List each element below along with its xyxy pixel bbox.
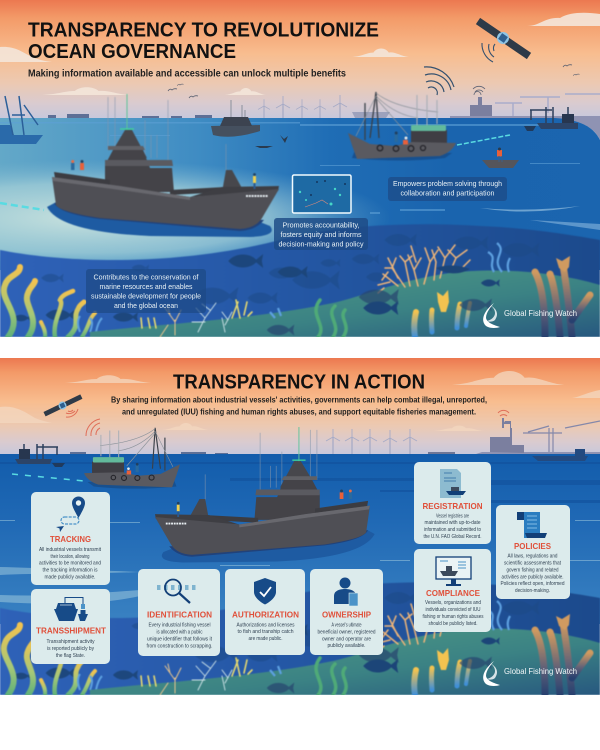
water streaks	[0, 462, 600, 503]
panel: transparency to revolutionize ocean governance	[0, 0, 600, 337]
card: compliance: should be publicly listed.	[428, 621, 478, 627]
card: compliance: COMPLIANCE	[426, 588, 480, 598]
card: identification	[138, 569, 220, 656]
card: compliance: fishing or human rights abuses	[422, 614, 484, 620]
card: registration: Vessel registries are	[436, 514, 469, 520]
card: compliance	[414, 549, 491, 632]
title: OCEAN GOVERNANCE	[28, 41, 236, 63]
wifi on building	[473, 86, 485, 95]
card: policies: POLICIES	[514, 541, 551, 551]
card: tracking: the tracking information is	[42, 568, 98, 574]
logo: Global Fishing Watch	[483, 303, 577, 328]
card: registration: information and submitted to	[424, 527, 481, 533]
wind turbines	[258, 95, 348, 118]
card: tracking: their location, allowing	[50, 554, 90, 560]
icon: magnifier over ID code	[157, 580, 198, 603]
sea bottom	[0, 224, 600, 337]
trawler left	[0, 96, 43, 144]
callout: problem solving: collaboration and participation	[400, 188, 494, 198]
card: policies: decision-making.	[515, 588, 550, 594]
icon: transshipment vessels	[54, 597, 88, 621]
card: identification: IDENTIFICATION	[147, 610, 212, 620]
fishing boat	[348, 92, 456, 160]
card: policies: All laws, regulations and	[508, 554, 558, 560]
icon: owner with document	[334, 578, 358, 606]
light bands	[0, 520, 600, 604]
card: authorization: to fish and tranship catch	[238, 629, 294, 635]
water streaks	[0, 122, 600, 230]
water	[0, 118, 600, 270]
water light	[0, 165, 376, 260]
callout: conservation: sustainable development for people	[91, 292, 201, 300]
card: policies: scientific assessments that	[504, 560, 562, 566]
card: identification: unique identifier that follows it	[147, 636, 213, 642]
icon: shield check	[254, 578, 276, 604]
callout: conservation	[86, 269, 206, 313]
satellite	[45, 385, 81, 426]
card: ownership: publicly available.	[328, 643, 366, 649]
satellite signal	[482, 43, 495, 62]
card: authorization: Authorizations and licenses	[236, 622, 295, 628]
net trail	[457, 135, 510, 145]
land right	[450, 116, 600, 140]
small birds over water	[255, 135, 288, 148]
fishing boat	[84, 428, 180, 489]
intro text	[111, 396, 487, 416]
icon: monitor with vessel	[436, 557, 471, 586]
card: authorization: are made public.	[248, 636, 282, 642]
trail left of ship	[0, 203, 44, 210]
card: transshipment: the flag State.	[56, 653, 85, 659]
icon: map pin and track	[56, 497, 85, 532]
card: ownership: owner and operator are	[322, 636, 371, 642]
dark ship left	[15, 444, 65, 467]
title	[28, 22, 378, 58]
callout: problem solving	[388, 177, 507, 201]
card: tracking: made publicly available.	[44, 574, 96, 580]
callout: accountability: Promotes accountability,	[282, 220, 360, 230]
subtitle: Making information available and accessible can unlock multiple benefits	[28, 68, 346, 80]
card: identification: is allocated with a public	[156, 630, 203, 636]
callout: conservation: Contributes to the conservation of	[94, 272, 199, 282]
card: ownership: beneficial owner, registered	[318, 630, 376, 636]
card: registration	[414, 462, 491, 544]
card: authorization	[225, 569, 305, 655]
card: identification: from construction to scrapping.	[146, 644, 212, 650]
big ship	[47, 94, 279, 237]
card: policies	[496, 505, 570, 599]
card: identification: Every industrial fishing vessel	[148, 622, 210, 628]
clouds	[0, 371, 600, 431]
card: transshipment	[31, 589, 110, 664]
icon: scroll	[517, 512, 547, 538]
sky	[0, 358, 600, 455]
sea bottom	[0, 582, 600, 695]
distant ships	[48, 94, 600, 118]
callout: conservation: and the global ocean	[114, 301, 178, 310]
card: ownership	[310, 569, 383, 655]
card: transshipment: is reported publicly by	[47, 646, 94, 652]
icon: registry document with vessel	[440, 469, 466, 498]
title: TRANSPARENCY IN ACTION	[173, 372, 425, 394]
signal arcs	[424, 67, 454, 95]
dark ship right	[524, 107, 578, 131]
intro text: By sharing information about industrial vessels' activities, governments can help combat illegal, unreported,	[111, 396, 487, 404]
card: transshipment: Transshipment activity	[46, 639, 95, 645]
callout: conservation: marine resources and enables	[100, 282, 193, 291]
clouds	[0, 13, 600, 95]
card: tracking: All industrial vessels transmit	[39, 547, 102, 553]
water	[0, 454, 600, 624]
map screen	[292, 175, 351, 213]
port and distant ships	[70, 418, 600, 455]
mid ship	[211, 100, 260, 137]
card: ownership: A vessel's ultimate	[332, 622, 362, 628]
card: tracking: activities to be monitored and	[39, 560, 101, 566]
card: registration: maintained with up-to-date	[424, 520, 481, 526]
card: ownership: OWNERSHIP	[322, 610, 371, 620]
small boat	[482, 148, 519, 168]
callout: problem solving: Empowers problem solving through	[393, 179, 502, 188]
card: registration: REGISTRATION	[422, 501, 482, 511]
card: tracking: TRACKING	[50, 534, 91, 544]
birds	[168, 65, 580, 98]
card: registration: the U.N. FAO Global Record.	[424, 534, 482, 540]
card: tracking	[31, 492, 110, 585]
logo: Global Fishing Watch	[483, 661, 577, 686]
callout: accountability	[274, 218, 368, 250]
big ship	[155, 427, 375, 562]
callout: accountability: decision-making and policy	[278, 240, 364, 248]
card: compliance: individuals convicted of IUU	[426, 607, 481, 613]
wind turbines	[326, 429, 418, 454]
title: TRANSPARENCY TO REVOLUTIONIZE	[28, 20, 379, 42]
satellite	[478, 21, 529, 56]
net trail	[12, 474, 84, 481]
intro text: and unregulated (IUU) fishing and human rights abuses, and support equitable fisheries management.	[122, 408, 476, 416]
satellite signal	[66, 409, 78, 417]
wifi on building	[498, 410, 509, 416]
sky	[0, 0, 600, 119]
card: policies: activities are publicly available.	[502, 574, 564, 580]
card: policies: Policies reflect open, informed	[500, 581, 565, 587]
card: compliance: Vessels, organizations and	[425, 600, 481, 606]
callout: accountability: fosters equity and informs	[280, 230, 362, 239]
panel: transparency in action	[0, 358, 600, 695]
card: policies: govern fishing and related	[506, 568, 559, 574]
card: authorization: AUTHORIZATION	[232, 610, 299, 620]
dark ship right	[532, 449, 588, 461]
signal arcs	[86, 419, 100, 436]
card: transshipment: TRANSSHIPMENT	[36, 626, 107, 636]
